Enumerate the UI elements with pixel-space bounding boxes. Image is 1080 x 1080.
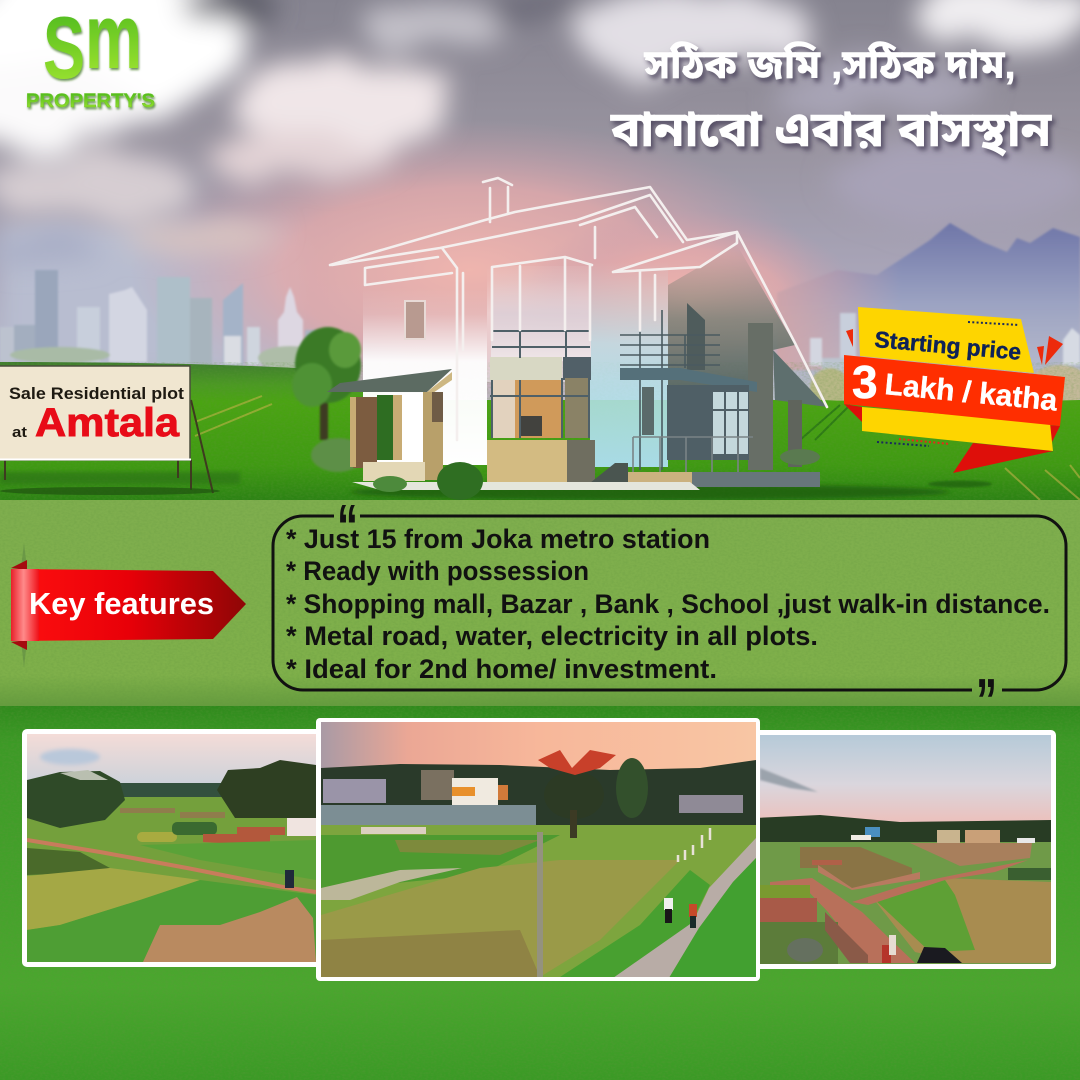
steps and path: [363, 462, 425, 481]
sign panel: [0, 366, 190, 460]
badge darts: [846, 329, 1063, 365]
house illustration: [327, 178, 827, 500]
upper glazed bay: [491, 266, 591, 361]
ribbon tail: [21, 543, 27, 668]
bengali headline: [610, 42, 1052, 157]
feature lines: * Shopping mall, Bazar , Bank , School ,just walk-in distance.: [286, 589, 1050, 619]
ribbon label: Key features: [29, 586, 214, 621]
headline line two: বানাবো এবার বাসস্থান: [610, 103, 1052, 157]
logo letter S: S: [43, 0, 85, 97]
closing quote mark: ”: [976, 667, 997, 736]
price unit: Lakh / katha: [883, 368, 1059, 418]
features list: [273, 493, 1066, 736]
right roof underside: [668, 245, 795, 410]
city skyline left: [0, 270, 322, 370]
tree beside house: [292, 327, 365, 472]
badge folds: [844, 404, 1060, 473]
features outline: [273, 516, 1066, 690]
price badge: [844, 307, 1065, 488]
mountains and skyline: [0, 223, 1080, 408]
balcony slab: [620, 368, 757, 392]
photo: right plot: [752, 730, 1056, 969]
city skyline right: [810, 313, 1080, 408]
small window: [405, 301, 425, 339]
sign heading: Sale Residential plot: [9, 385, 185, 403]
key features ribbon: [11, 543, 246, 668]
ribbon body: [11, 569, 246, 641]
badge yellow shapes: [858, 307, 1053, 451]
feature lines: * Ideal for 2nd home/ investment.: [286, 654, 717, 684]
logo: [26, 0, 155, 112]
feature lines: * Metal road, water, electricity in all plots.: [286, 621, 818, 651]
sign at: at: [12, 425, 27, 441]
badge red band: [844, 355, 1065, 426]
sign location: Amtala: [35, 401, 180, 445]
headline line one: সঠিক জমি ,সঠিক দাম,: [643, 42, 1016, 87]
photo: centre plot: [316, 718, 760, 981]
key features band: [0, 500, 1080, 706]
feature lines: * Just 15 from Joka metro station: [286, 524, 710, 554]
lower glazed area: [667, 385, 749, 460]
signboard: [0, 366, 220, 495]
sign legs: [5, 400, 213, 493]
feature lines: [286, 524, 1050, 684]
opening quote mark: “: [337, 493, 358, 562]
feature lines: * Ready with possession: [286, 556, 589, 586]
badge dots: [877, 322, 1019, 446]
bushes: [437, 462, 483, 500]
mountains right: [777, 223, 1080, 370]
bottom grass field: [0, 706, 1080, 1080]
porch: [327, 369, 452, 392]
photo: left plot: [22, 729, 322, 967]
top grass field: [0, 362, 1080, 500]
sky background with clouds: [0, 0, 1080, 420]
upper right balcony rails: [620, 310, 720, 470]
logo name: PROPERTY'S: [26, 91, 155, 112]
white line-drawn roof: [330, 178, 827, 440]
starting price text: Starting price: [874, 326, 1022, 365]
price number: 3: [852, 356, 878, 408]
house walls: [363, 287, 487, 465]
stone base: [487, 440, 567, 485]
